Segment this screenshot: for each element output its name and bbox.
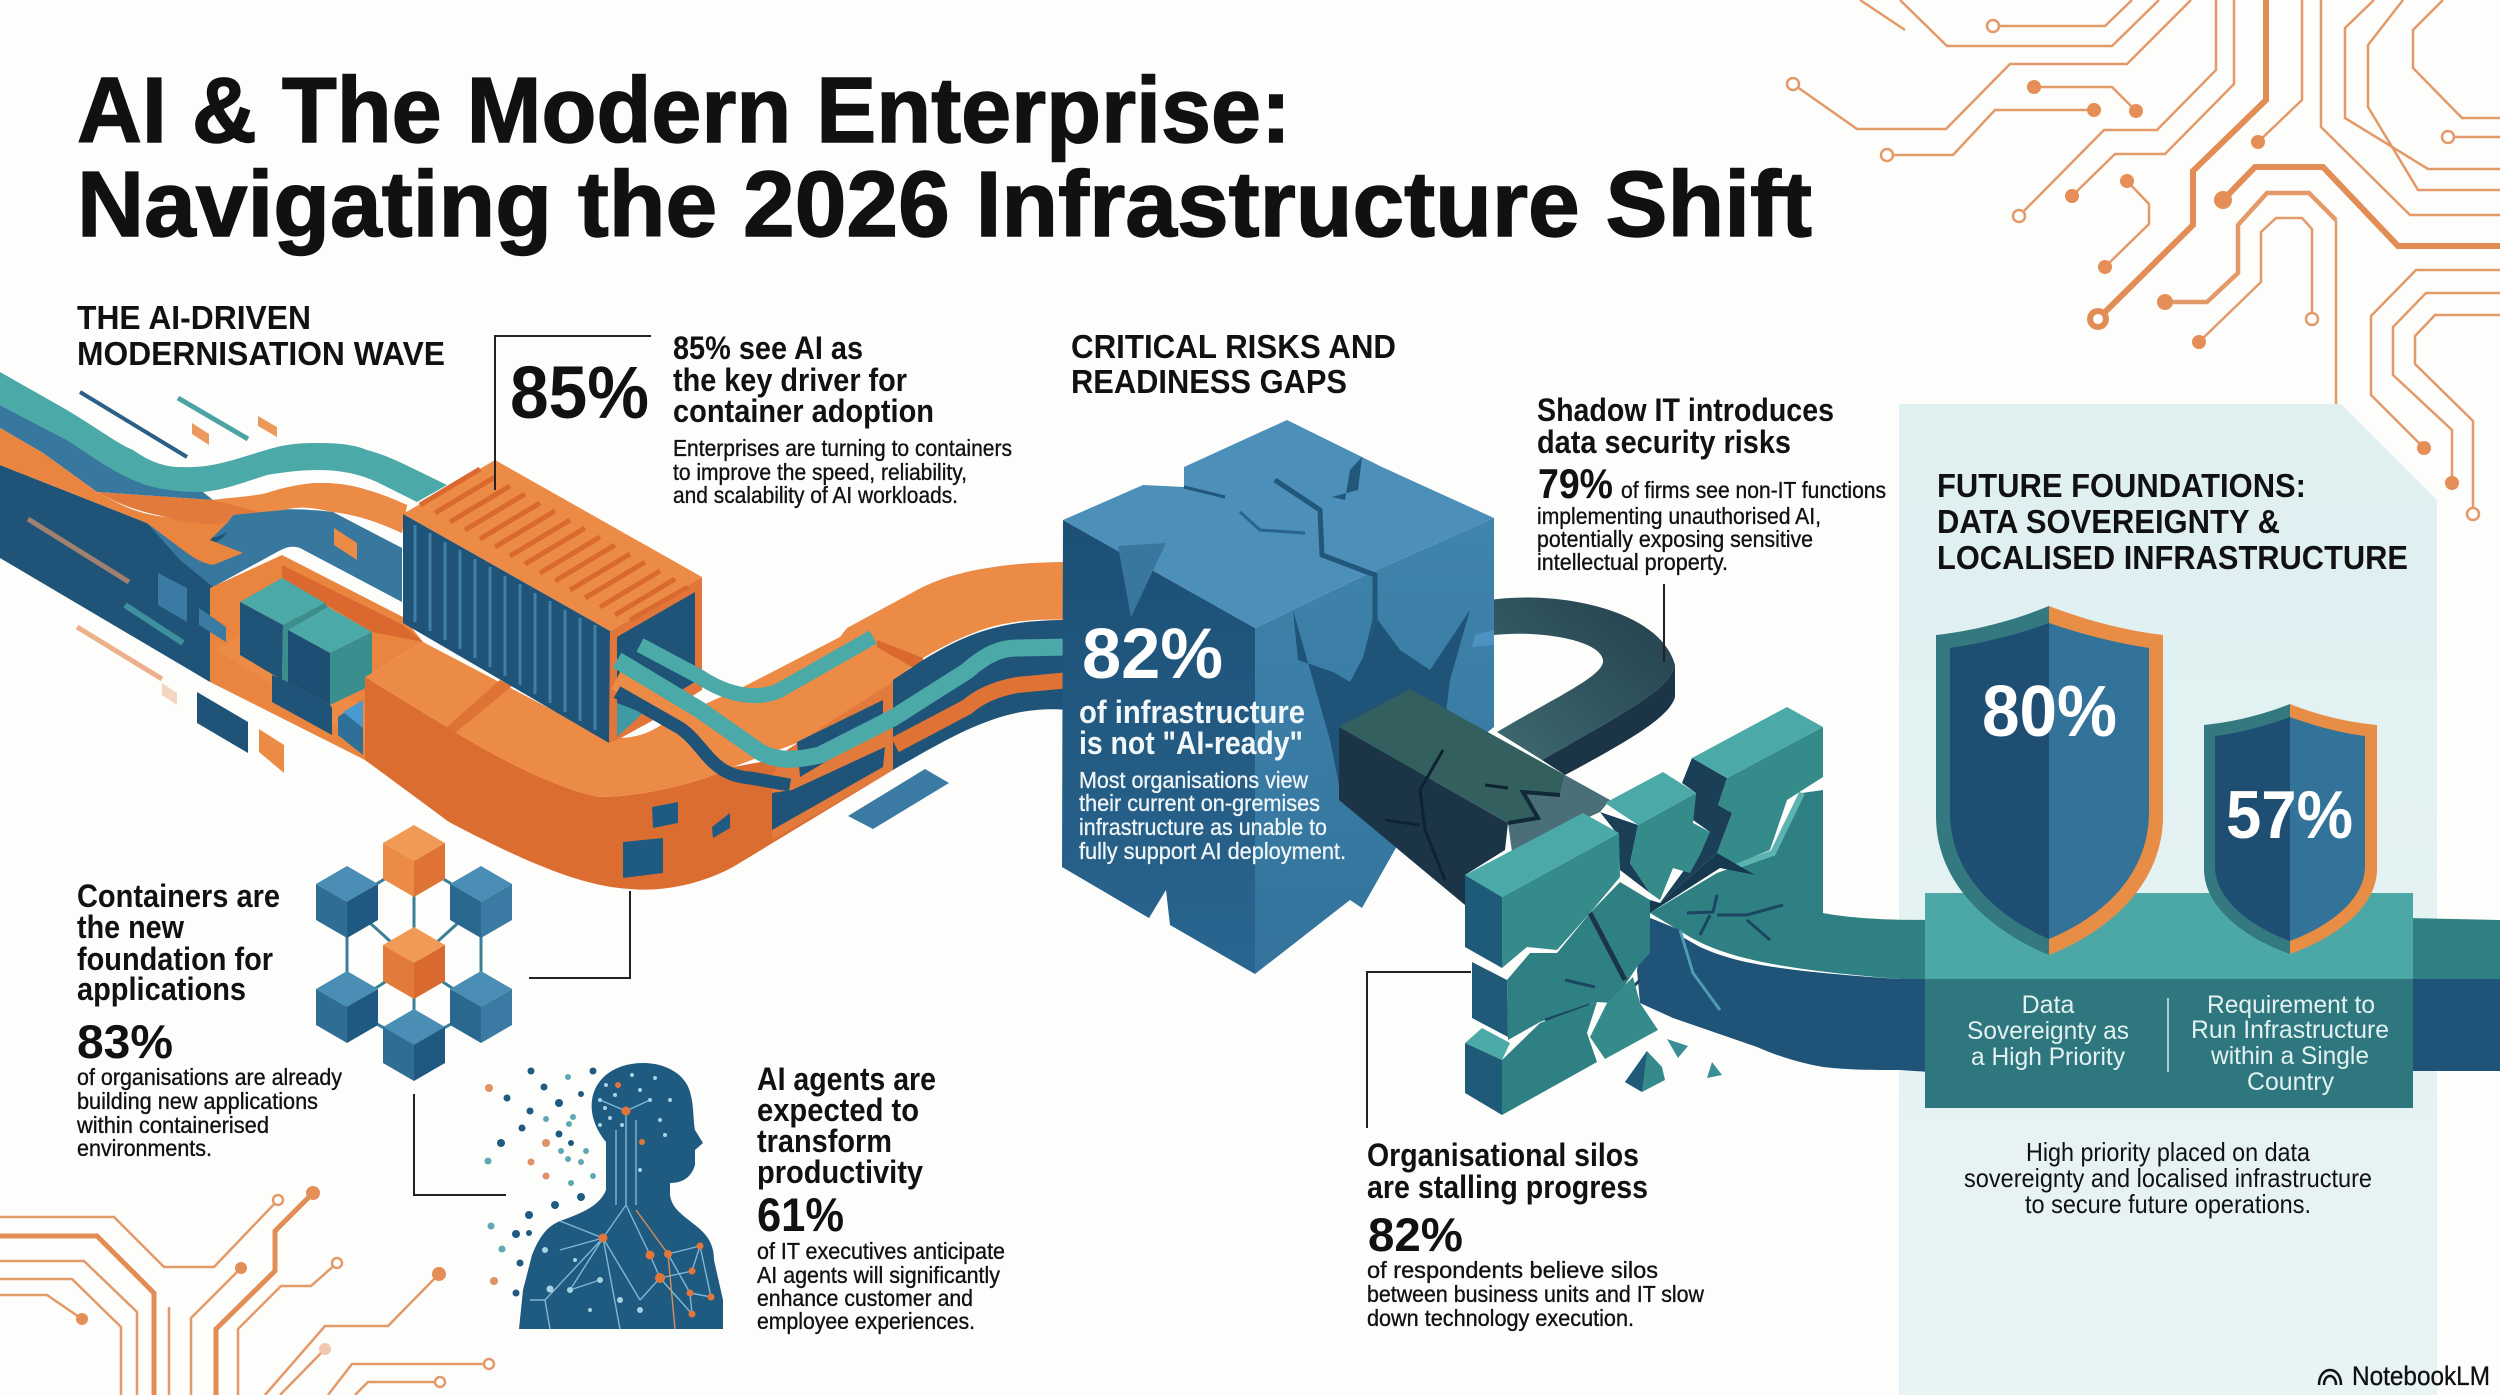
illustration: modernisation wave pipeline and container [0, 372, 1070, 890]
heading: future foundations: LOCALISED INFRASTRUCTURE [1937, 539, 2408, 576]
stat: 61% AI agents: of IT executives anticipate [757, 1238, 1005, 1264]
block D [1507, 882, 1650, 1040]
ribbon: dark blue main band [0, 465, 213, 682]
stat: 85% container adoption: and scalability of AI workloads. [673, 482, 958, 508]
stat: 83% containers foundation: foundation for [77, 941, 273, 977]
stat: 82% not AI-ready: their current on-gremises [1079, 790, 1320, 816]
ribbon: teal [0, 372, 447, 502]
stat: 82% organisational silos: between business units and IT slow [1367, 1281, 1704, 1307]
ribbon: dark blue right [893, 620, 1070, 770]
stat: 85% container adoption [510, 330, 1012, 508]
stat: 83% containers foundation [76, 878, 342, 1161]
stat: 61% AI agents: expected to [757, 1092, 919, 1128]
panel: future foundations background [1899, 404, 2437, 1395]
stat: 61% AI agents: AI agents are [757, 1061, 936, 1097]
stat: 79% shadow IT: potentially exposing sensitive [1537, 526, 1813, 552]
circuit decoration: bottom left [0, 1186, 494, 1395]
icon: hexagonal container cluster [316, 825, 512, 1081]
heading: modernisation wave [77, 299, 445, 372]
stat: 85% container adoption: container adoption [673, 393, 934, 429]
heading: future foundations [1937, 467, 2408, 576]
title: Navigating the 2026 Infrastructure Shift [77, 152, 1812, 256]
debris [1625, 1051, 1665, 1092]
stat: 83% containers foundation: applications [77, 971, 246, 1007]
stat: 82% not AI-ready: is not "AI-ready" [1079, 725, 1303, 761]
stat: 85% container adoption: 85% see AI as [673, 330, 863, 366]
heading: critical risks: READINESS GAPS [1071, 363, 1347, 400]
label: data sovereignty [1967, 991, 2129, 1071]
particle dots [484, 1068, 596, 1296]
decorative tiles [28, 392, 949, 878]
stat: 83% containers foundation: Containers are [77, 878, 280, 914]
shield: 80% data sovereignty [1936, 606, 2163, 955]
orange bend: rising plate [720, 562, 1070, 743]
block C [1717, 727, 1823, 865]
stripes: flowing through container [617, 637, 1070, 785]
stat: 82% organisational silos: down technology execution. [1367, 1305, 1634, 1331]
text: future operations summary [1964, 1137, 2372, 1219]
stat: 82% organisational silos [1367, 1137, 1704, 1331]
shield: 57% single country: 57% [2226, 777, 2353, 853]
stat: 82% organisational silos: 82% [1368, 1208, 1463, 1261]
ribbon: orange band and tongue [0, 428, 243, 565]
title [77, 58, 1812, 256]
stat: 83% containers foundation: environments. [77, 1135, 212, 1161]
orange bend: shaded lower face [365, 677, 893, 890]
text: future operations summary: to secure future operations. [2025, 1189, 2311, 1219]
stat: 82% not AI-ready [1079, 615, 1346, 864]
stat: 61% AI agents: 61% [757, 1188, 844, 1241]
ribbon: blue under-wave [147, 509, 402, 602]
heading: critical risks [1071, 328, 1396, 400]
connector lines [414, 336, 1664, 1195]
block A [1502, 833, 1620, 968]
icon: AI human head with network [484, 1063, 723, 1329]
stat: 82% organisational silos: are stalling progress [1367, 1169, 1648, 1205]
heading: critical risks: CRITICAL RISKS AND [1071, 328, 1396, 365]
ribbon: teal wall and top [1650, 790, 1930, 979]
label: single country: Run Infrastructure [2191, 1016, 2389, 1044]
label: single country: Requirement to [2207, 991, 2375, 1019]
stat: 82% not AI-ready: fully support AI deployment. [1079, 838, 1346, 864]
stat: 83% containers foundation: of organisations are already [77, 1064, 342, 1090]
heading: modernisation wave: THE AI-DRIVEN [77, 299, 311, 336]
illustration: broken teal wall and ribbon [1465, 707, 2500, 1115]
text: future operations summary: High priority placed on data [2026, 1137, 2310, 1167]
shield: 57% single country [2204, 704, 2377, 954]
stat: 61% AI agents: AI agents will significantly [757, 1262, 1000, 1288]
stat: 79% shadow IT: data security risks [1537, 424, 1791, 460]
stat: 61% AI agents [757, 1061, 1005, 1334]
stat: 61% AI agents: productivity [757, 1154, 923, 1190]
stat: 82% not AI-ready: 82% [1082, 615, 1223, 694]
label: single country: within a Single [2210, 1042, 2369, 1070]
stat: 83% containers foundation: within containerised [76, 1112, 269, 1138]
block E [1465, 1028, 1510, 1060]
ribbon: blue middle [0, 405, 213, 500]
orange bend: light top face [365, 642, 797, 797]
decorative tile [334, 528, 357, 560]
label: data sovereignty: Data [2022, 991, 2074, 1019]
stat: 85% container adoption: to improve the speed, reliability, [673, 459, 967, 485]
box: orange server bay [210, 555, 423, 760]
stat: 79% shadow IT: intellectual property. [1537, 549, 1728, 575]
wall cracks [1687, 895, 1783, 940]
title: AI & The Modern Enterprise: [77, 58, 1291, 162]
stat: 83% containers foundation: building new applications [77, 1088, 318, 1114]
block B [1600, 812, 1650, 893]
label: single country: Country [2247, 1068, 2334, 1096]
heading: modernisation wave: MODERNISATION WAVE [77, 335, 445, 372]
stat: 85% container adoption: the key driver for [673, 362, 907, 398]
ribbon: right of box [2405, 918, 2500, 979]
stat: 61% AI agents: transform [757, 1123, 892, 1159]
stat: 85% container adoption: 85% [510, 351, 649, 434]
stat: 82% organisational silos: of respondents believe silos [1367, 1257, 1658, 1283]
stat: 79% shadow IT [1537, 392, 1886, 575]
label: single country [2191, 991, 2389, 1096]
heading: future foundations: FUTURE FOUNDATIONS: [1937, 467, 2306, 504]
stat: 79% shadow IT: 79% [1538, 460, 1613, 507]
centre dark and blue [1650, 853, 1755, 913]
circuit decoration: top right [1787, 0, 2500, 520]
stat: 82% organisational silos: Organisational silos [1367, 1137, 1639, 1173]
frame: orange lower panel [772, 682, 893, 840]
stat: 83% containers foundation: 83% [77, 1015, 173, 1068]
stat: 82% not AI-ready: Most organisations view [1079, 767, 1308, 793]
teal label box [1925, 893, 2413, 1108]
cubes: teal servers [240, 578, 372, 755]
chunk [1590, 977, 1658, 1059]
stat: 82% not AI-ready: infrastructure as unable to [1079, 814, 1327, 840]
stat: 79% shadow IT: Shadow IT introduces [1537, 392, 1834, 428]
label: data sovereignty: Sovereignty as [1967, 1017, 2129, 1045]
stat: 83% containers foundation: the new [77, 909, 184, 945]
icon: dark arch between cube and wall [1490, 598, 1675, 775]
stat: 85% container adoption: Enterprises are turning to containers [673, 435, 1012, 461]
text: future operations summary: sovereignty and localised infrastructure [1964, 1163, 2372, 1193]
ribbon: blue lower band [1637, 917, 1930, 1072]
illustration: dark block [1339, 689, 1610, 905]
illustration: cracked blue cube [1062, 420, 1494, 974]
stat: 82% not AI-ready: of infrastructure [1079, 694, 1305, 730]
heading: future foundations: DATA SOVEREIGNTY & [1937, 503, 2280, 540]
container: shipping box [403, 460, 702, 743]
stat: 79% shadow IT: of firms see non-IT functions [1621, 477, 1886, 503]
stat: 61% AI agents: enhance customer and [757, 1285, 973, 1311]
label: data sovereignty: a High Priority [1971, 1043, 2125, 1071]
ribbon: orange upper wave [97, 483, 407, 533]
stat: 79% shadow IT: implementing unauthorised AI, [1537, 503, 1821, 529]
stat: 61% AI agents: employee experiences. [757, 1308, 975, 1334]
cracks [1118, 543, 1166, 617]
shield: 80% data sovereignty: 80% [1982, 672, 2117, 752]
